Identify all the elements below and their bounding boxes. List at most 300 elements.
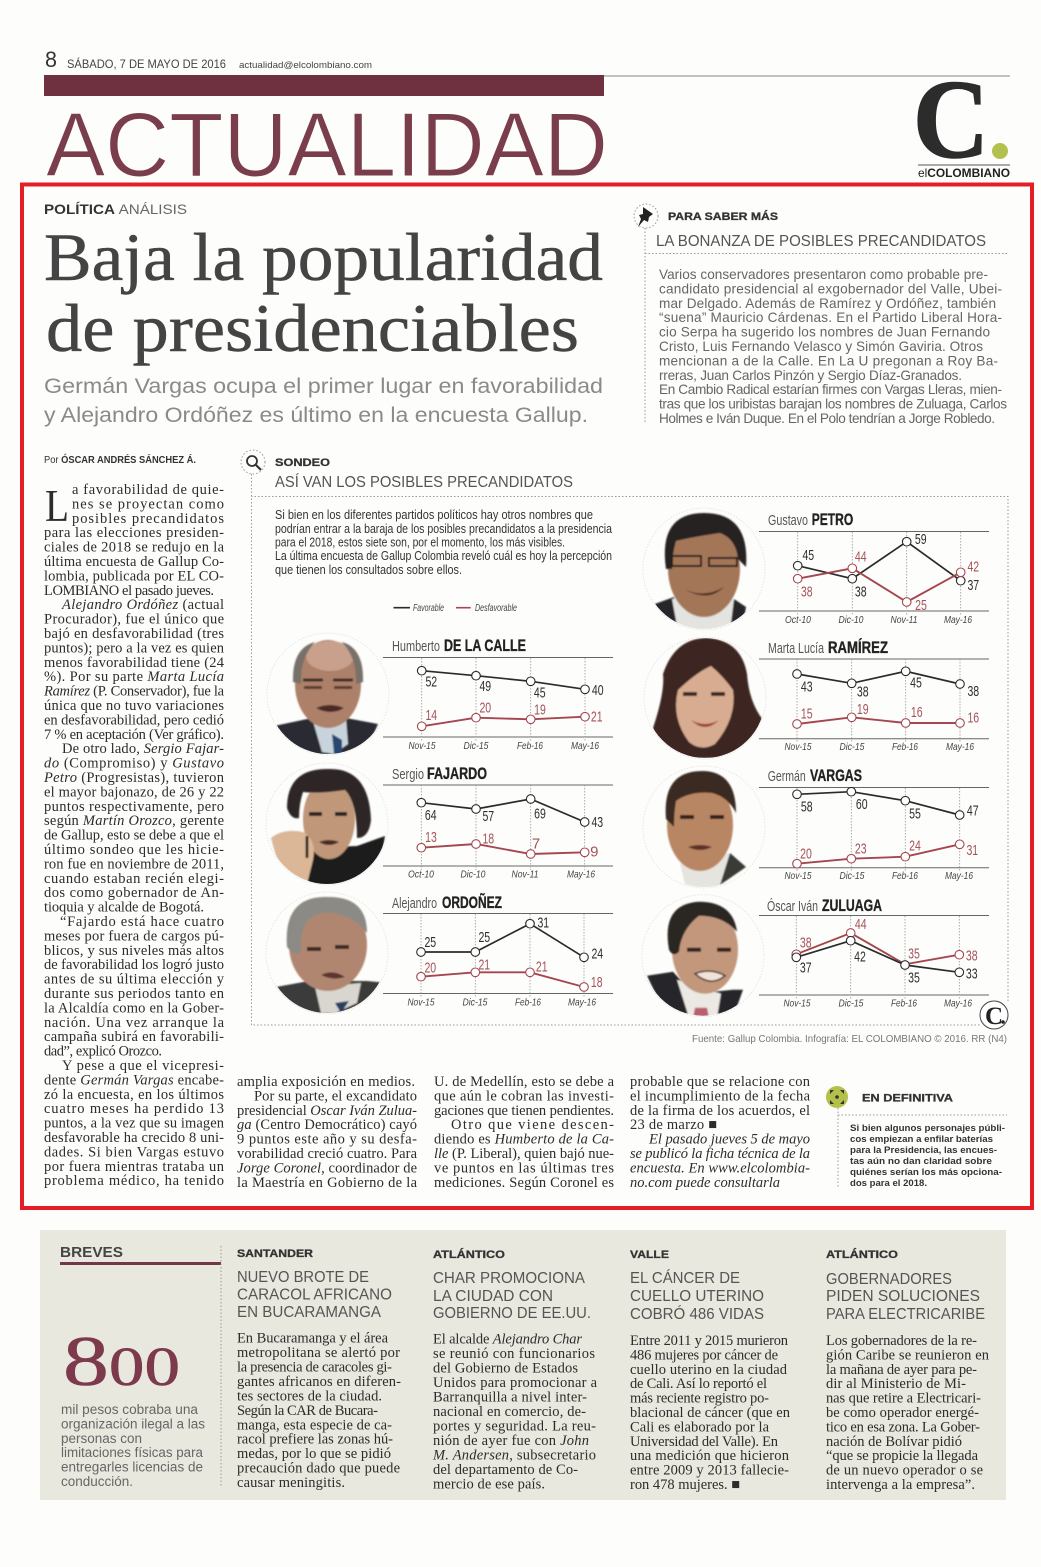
article column 3: diendo es Humberto de la Ca- xyxy=(434,1132,614,1148)
article column 1: problema médico, ha tenido xyxy=(44,1173,224,1189)
article column 4: de la firma de los acuerdos, el xyxy=(630,1103,810,1119)
red highlight frame xyxy=(22,184,1032,1208)
brief: Valle: 486 mujeres por cáncer de xyxy=(630,1347,778,1363)
brief: Atlantico, Char: nacional en comercio, de- xyxy=(433,1404,586,1420)
brief: Valle: EL CÁNCER DE xyxy=(630,1268,740,1287)
brief: Valle: una medición que hicieron xyxy=(630,1448,790,1464)
line chart: 13 xyxy=(425,829,437,846)
article column 1: menos favorabilidad tiene (24 xyxy=(44,655,225,671)
article column 1: antes de su última elección y xyxy=(44,972,225,988)
article column 1: De otro lado, Sergio Fajar- xyxy=(62,741,224,757)
line chart: May-16 xyxy=(945,870,973,882)
article column 1: Alejandro Ordóñez (actual xyxy=(61,597,224,613)
brief: Valle: Cali es elaborado por la xyxy=(630,1419,770,1435)
article column 1: tioquia y alcalde de Bogotá. xyxy=(44,900,204,916)
headline: Baja la popularidad xyxy=(44,219,603,295)
intro text xyxy=(275,508,612,577)
brief: Atlantico, gobernadores: “que se propicie la llegada xyxy=(826,1448,979,1464)
brief: Santander: tes sectores de la ciudad. xyxy=(237,1388,382,1404)
name: RAMÍREZ xyxy=(828,638,888,657)
article column 1: a favorabilidad de quie- xyxy=(72,482,224,498)
brief: Atlantico, gobernadores: nación de Bolívar pidió xyxy=(826,1434,962,1450)
text block: rreras, Juan Carlos Pinzón y Sergio Díaz-Granados. xyxy=(659,368,962,383)
line chart: 44 xyxy=(855,916,867,933)
brief: Valle: VALLE xyxy=(630,1249,669,1261)
brief: Valle: más reciente registro po- xyxy=(630,1391,769,1407)
article column 1: bajó en desfavorabilidad (tres xyxy=(44,626,224,642)
article column 2: presidencial Oscar Iván Zulua- xyxy=(237,1103,417,1119)
brief: Atlantico, gobernadores: gión Caribe se reunieron en xyxy=(826,1347,990,1363)
line chart: May-16 xyxy=(567,868,595,880)
name: DE LA CALLE xyxy=(444,636,526,655)
name: ZULUAGA xyxy=(822,896,882,915)
article column 3: lle (P. Liberal), quien bajó nue- xyxy=(434,1146,614,1162)
name: Humberto xyxy=(392,638,440,655)
text block: tas aún no dan claridad sobre xyxy=(850,1156,992,1167)
line chart: Dic-15 xyxy=(840,870,865,882)
article column 1: blicos, y sus niveles más altos xyxy=(44,943,224,959)
line chart: 45 xyxy=(802,547,814,564)
line chart: 37 xyxy=(800,960,812,977)
brief: Santander: Según la CAR de Bucara- xyxy=(237,1403,378,1419)
subheadline xyxy=(44,375,603,427)
brief: Atlantico, gobernadores: nas que retire a Electricari- xyxy=(826,1391,981,1407)
brief: Atlantico, gobernadores: PIDEN SOLUCIONES xyxy=(826,1288,980,1305)
article column 1: %). Por su parte Marta Lucía xyxy=(44,669,224,685)
logo: El Colombiano: C xyxy=(913,58,989,182)
line chart: Oct-10 xyxy=(785,614,811,626)
portrait: Vargas xyxy=(643,766,765,889)
article column 1: L xyxy=(45,481,69,531)
line chart: 52 xyxy=(425,674,437,691)
line chart: 19 xyxy=(534,701,546,718)
brief: Santander: CARACOL AFRICANO xyxy=(237,1286,392,1304)
line chart: 24 xyxy=(591,945,603,962)
article column 2: Jorge Coronel, coordinador de xyxy=(237,1160,417,1176)
line chart: Nov-15 xyxy=(784,998,811,1010)
article column 1: cuatro meses ha perdido 13 xyxy=(44,1101,224,1117)
line chart: May-16 xyxy=(944,614,972,626)
article column 3: mediciones. Según Coronel es xyxy=(434,1175,614,1191)
brief: Atlantico, gobernadores: PARA ELECTRICARIBE xyxy=(826,1306,985,1323)
headline xyxy=(44,219,603,366)
headline: de presidenciables xyxy=(46,290,579,366)
line chart: 23 xyxy=(855,841,867,858)
brief: Santander: gantes africanos en diferen- xyxy=(237,1374,401,1390)
brief: Santander: manga, esta especie de ca- xyxy=(237,1417,392,1433)
article column 1: campaña subirá en favorabili- xyxy=(44,1029,224,1045)
title: LA BONANZA DE POSIBLES PRECANDIDATOS xyxy=(656,233,986,250)
line chart: Nov-11 xyxy=(890,614,918,626)
article column 1: cuando estaban recién elegi- xyxy=(44,871,224,887)
text block xyxy=(659,267,1007,426)
article column 1: de favorabilidad los logró justo xyxy=(44,957,224,973)
brief: Santander: precaución dado que puede xyxy=(237,1461,400,1477)
subheadline: y Alejandro Ordóñez es último en la encuesta Gallup. xyxy=(44,404,588,427)
label: PARA SABER MÁS xyxy=(668,210,778,223)
line chart: 7 xyxy=(532,835,540,852)
line chart: Nov-15 xyxy=(408,996,435,1008)
brief: Atlantico, Char: M. Andersen, subsecretario xyxy=(432,1448,596,1464)
brief: Santander: metropolitana se alertó por xyxy=(237,1345,400,1361)
icon: arrows on green circle xyxy=(826,1086,848,1108)
name xyxy=(768,766,862,785)
brief: Valle: de Cali. Así lo reportó el xyxy=(630,1376,767,1392)
article column 1: nación. Una vez arranque la xyxy=(44,1015,225,1031)
line chart: Feb-16 xyxy=(517,740,543,752)
number caption: entregarles licencias de xyxy=(61,1460,203,1474)
kicker: POLÍTICA ANÁLISIS xyxy=(44,201,187,217)
brief: Valle: entre 2009 y 2013 fallecie- xyxy=(630,1463,789,1479)
line chart xyxy=(383,658,613,752)
brief: Valle: Universidad del Valle). En xyxy=(630,1434,779,1450)
article column 1: posibles precandidatos xyxy=(72,511,224,527)
brief: Atlantico, Char: nión de ayer fue con John xyxy=(433,1433,589,1449)
line chart: 25 xyxy=(478,929,490,946)
brief: Valle: cuello uterino en la ciudad xyxy=(630,1362,788,1378)
line chart: 60 xyxy=(856,796,868,813)
name xyxy=(767,896,882,915)
line chart: Nov-11 xyxy=(512,868,538,880)
brief: Atlantico, Char: GOBIERNO DE EE.UU. xyxy=(433,1305,591,1322)
line chart: Dic-15 xyxy=(840,741,865,753)
article column 4: no.com puede consultarla xyxy=(630,1175,780,1191)
line chart: 58 xyxy=(801,799,813,816)
line chart: 18 xyxy=(591,974,603,991)
name xyxy=(768,638,888,657)
line chart xyxy=(759,787,989,882)
line chart: 21 xyxy=(591,709,603,726)
line chart: 19 xyxy=(857,701,869,718)
text block: Cristo, Luis Fernando Velasco y Simón Gaviria. Otros xyxy=(659,339,983,354)
brief: Santander: medas, por lo que se pidió xyxy=(237,1446,391,1462)
text block: Varios conservadores presentaron como probable pre- xyxy=(659,267,988,282)
line chart: 33 xyxy=(966,965,978,982)
line chart: 38 xyxy=(801,584,813,601)
article column 3: que aún le cobran las investi- xyxy=(434,1088,614,1104)
article column 2: amplia exposición en medios. xyxy=(237,1074,415,1090)
label: SONDEO xyxy=(275,457,330,469)
line chart: 43 xyxy=(801,679,813,696)
brief: Atlantico, Char: del departamento de Co- xyxy=(433,1462,578,1478)
name xyxy=(392,764,487,783)
article column 1: por fuera mientras trataba un xyxy=(44,1159,225,1175)
name: Alejandro xyxy=(392,895,437,912)
article column 1: zó la encuesta, en los últimos xyxy=(44,1087,224,1103)
text block: quiénes serían los más opciona- xyxy=(850,1167,1002,1178)
icon: magnifier xyxy=(241,450,265,474)
article column 2: vorabilidad creció cuatro. Para xyxy=(237,1146,418,1162)
brief: Atlantico, Char: El alcalde Alejandro Char xyxy=(433,1332,582,1348)
article column 2 xyxy=(237,1074,418,1191)
number caption xyxy=(61,1402,205,1489)
article column 4: encuesta. En www.elcolombia- xyxy=(630,1160,810,1176)
line chart: Nov-15 xyxy=(784,870,812,882)
article column 1: la Alcaldía como en la Gober- xyxy=(44,1000,224,1016)
line chart: 20 xyxy=(424,959,436,976)
line chart: 42 xyxy=(854,949,866,966)
article column 3: Otro que viene descen- xyxy=(451,1117,614,1133)
article column 3: ve puntos en las últimas tres xyxy=(434,1160,614,1176)
line chart: 55 xyxy=(909,805,921,822)
line chart: 37 xyxy=(967,577,979,594)
number caption: limitaciones físicas para xyxy=(61,1445,203,1460)
brief: Atlantico, Char xyxy=(432,1248,598,1492)
brief: Atlantico, Char: del Gobierno de Estados xyxy=(433,1360,578,1376)
name xyxy=(392,636,526,655)
brief: Atlantico, gobernadores: ATLÁNTICO xyxy=(826,1248,899,1261)
brief: Atlantico, gobernadores: GOBERNADORES xyxy=(826,1271,952,1288)
portrait: Fajardo xyxy=(266,763,388,886)
intro text: podrían entrar a la baraja de los posibles precandidatos a la presidencia xyxy=(275,522,612,536)
source credit: Fuente: Gallup Colombia. Infografía: EL COLOMBIANO © 2016. RR (N4) xyxy=(692,1033,1007,1045)
article column 1: dades. Si bien Vargas estuvo xyxy=(44,1144,224,1160)
name: FAJARDO xyxy=(427,764,487,783)
line chart: 24 xyxy=(909,838,921,855)
line chart: Dic-15 xyxy=(838,998,864,1010)
brief: Santander: racol prefiere las zonas hú- xyxy=(237,1432,393,1448)
line chart: 40 xyxy=(592,682,604,699)
article column 1: puntos); pero a la vez es quien xyxy=(44,640,225,656)
brief: Santander: EN BUCARAMANGA xyxy=(237,1304,381,1321)
panel: sondeo infographic xyxy=(241,450,1008,1030)
line chart: 18 xyxy=(482,830,494,847)
article column 1: meses por fuera de cargos pú- xyxy=(44,928,224,944)
panel: chart De la Calle xyxy=(267,633,613,756)
line chart: Feb-16 xyxy=(891,998,917,1010)
article column 3 xyxy=(434,1074,615,1191)
text block: tras que los uribistas barajan los nombres de Zuluaga, Carlos xyxy=(659,397,1007,412)
brief: Atlantico, gobernadores: la mañana de ayer para pe- xyxy=(826,1362,977,1378)
brief: Atlantico, Char: portes y seguridad. La reu- xyxy=(433,1418,596,1434)
line chart: Nov-15 xyxy=(784,741,812,753)
line chart: 14 xyxy=(425,707,437,724)
brief: Atlantico, Char: LA CIUDAD CON xyxy=(433,1288,553,1305)
panel: chart Petro xyxy=(643,508,989,631)
brief: Atlantico, gobernadores: intervenga a la empresa”. xyxy=(826,1477,975,1493)
byline: Por ÓSCAR ANDRÉS SÁNCHEZ Á. xyxy=(44,453,196,466)
article column 4 xyxy=(630,1074,811,1191)
text block: cos empiezan a enfilar baterías xyxy=(850,1134,993,1145)
text block: cio Serpa ha sugerido los nombres de Juan Fernando xyxy=(659,325,990,340)
line chart: 21 xyxy=(536,959,548,976)
line chart: 64 xyxy=(425,807,437,824)
portrait: Ramirez xyxy=(644,637,766,759)
article column 1: durante sus periodos tanto en xyxy=(44,986,225,1002)
line chart: 31 xyxy=(537,914,549,931)
text block: para la Presidencia, las encues- xyxy=(850,1145,997,1156)
line chart: 45 xyxy=(910,675,922,692)
line chart: Nov-15 xyxy=(408,740,436,752)
big number: 800 xyxy=(63,1323,180,1401)
number caption: conducción. xyxy=(61,1474,133,1489)
line chart: May-16 xyxy=(946,741,974,753)
legend xyxy=(394,602,517,614)
line chart: 49 xyxy=(479,678,491,695)
line chart: 25 xyxy=(915,597,927,614)
name: Sergio xyxy=(392,766,424,783)
brief: Atlantico, gobernadores: dir al Ministerio de Mi- xyxy=(826,1376,966,1392)
brief: Atlantico, gobernadores: Los gobernadores de la re- xyxy=(826,1333,977,1349)
article column 4: el incumplimiento de la fecha xyxy=(630,1088,811,1104)
line chart xyxy=(383,914,613,1008)
label: EN DEFINITIVA xyxy=(862,1092,953,1104)
page header line: 8 xyxy=(45,47,57,72)
name: Marta Lucía xyxy=(768,640,824,657)
brief: Atlantico, Char: ATLÁNTICO xyxy=(433,1248,506,1261)
legend: Favorable xyxy=(413,602,444,614)
line chart xyxy=(383,785,613,880)
brief: Santander: En Bucaramanga y el área xyxy=(237,1331,389,1347)
brief: Santander: SANTANDER xyxy=(237,1248,313,1260)
line chart: Dic-15 xyxy=(462,996,488,1008)
name: Gustavo xyxy=(768,512,808,529)
brief: Valle: Entre 2011 y 2015 murieron xyxy=(630,1333,789,1349)
text block: Holmes e Iván Duque. En el Polo tendrían a Jorge Robledo. xyxy=(659,411,995,426)
line chart: 38 xyxy=(967,683,979,700)
article column 1: ciales de 2018 se redujo en la xyxy=(44,540,225,556)
name: PETRO xyxy=(812,510,853,529)
intro text: Si bien en los diferentes partidos políticos hay otros nombres que xyxy=(275,508,593,522)
line chart: 38 xyxy=(800,935,812,952)
line chart xyxy=(759,531,989,626)
article column 1: 7 % en aceptación (Ver gráfico). xyxy=(44,727,224,743)
line chart: 38 xyxy=(855,584,867,601)
article column 1: puntos, a la vez que su imagen xyxy=(44,1116,225,1132)
intro text: que tienen los consultados sobre ellos. xyxy=(275,563,462,577)
brief: Valle xyxy=(630,1249,791,1493)
portrait: Ordonez xyxy=(265,892,389,1015)
panel: en definitiva xyxy=(826,1086,1007,1189)
article column 2: 9 puntos este año y su desfa- xyxy=(237,1132,417,1148)
line chart: Dic-10 xyxy=(460,868,486,880)
article column 1: desfavorable ha crecido 8 uni- xyxy=(44,1130,224,1146)
brief: Valle: ron 478 mujeres. ■ xyxy=(630,1477,740,1493)
line chart: 9 xyxy=(590,844,598,861)
panel: chart Zuluaga xyxy=(642,895,989,1018)
article column 1: último sondeo que les hicie- xyxy=(44,842,224,858)
page header line xyxy=(45,47,372,72)
line chart: 42 xyxy=(967,559,979,576)
name: Óscar Iván xyxy=(767,898,818,915)
name xyxy=(768,510,853,529)
line chart: 16 xyxy=(967,710,979,727)
article column 2: Por su parte, el excandidato xyxy=(254,1088,417,1104)
line chart: 38 xyxy=(966,947,978,964)
subheadline: Germán Vargas ocupa el primer lugar en favorabilidad xyxy=(44,375,603,398)
brief: Valle: blacional de cáncer (que en xyxy=(630,1405,791,1421)
text block: En Cambio Radical estarían firmes con Vargas Lleras, mien- xyxy=(659,382,1002,397)
text block: mencionan a de la Calle. En La U pregonan a Roy Ba- xyxy=(659,353,998,368)
line chart: Feb-16 xyxy=(892,741,918,753)
title: ASÍ VAN LOS POSIBLES PRECANDIDATOS xyxy=(275,472,573,491)
portrait: Zuluaga xyxy=(642,895,764,1018)
article column 1: Petro (Progresistas), tuvieron xyxy=(43,770,225,786)
page header line: SÁBADO, 7 DE MAYO DE 2016 xyxy=(67,58,226,71)
article column 4: probable que se relacione con xyxy=(630,1074,811,1090)
article column 1: LOMBIANO el pasado jueves. xyxy=(44,583,214,599)
line chart: 59 xyxy=(915,531,927,548)
article column 1: única que no tuvo variaciones xyxy=(44,698,224,714)
brief: Valle: COBRÓ 486 VIDAS xyxy=(630,1304,764,1323)
panel: chart Fajardo xyxy=(266,763,613,886)
article column 4: El pasado jueves 5 de mayo xyxy=(648,1132,810,1148)
line chart: 47 xyxy=(967,803,979,820)
panel: chart Vargas xyxy=(643,766,989,889)
number caption: mil pesos cobraba una xyxy=(61,1402,198,1417)
line chart: Oct-10 xyxy=(408,868,434,880)
legend: Desfavorable xyxy=(475,602,517,614)
panel: para saber mas xyxy=(634,204,1008,426)
brief: Santander: causar meningitis. xyxy=(237,1475,345,1491)
brief: Santander: la presencia de caracoles gi- xyxy=(237,1360,392,1376)
article column 1: Ramírez (P. Conservador), fue la xyxy=(43,684,225,700)
line chart: May-16 xyxy=(568,996,596,1008)
name: ORDOÑEZ xyxy=(442,892,502,912)
portrait: De la Calle xyxy=(267,633,389,756)
article column 1: dad”, explicó Orozco. xyxy=(44,1044,162,1060)
article column 1: lombia, publicada por EL CO- xyxy=(44,568,224,584)
article column 1 xyxy=(43,481,225,1189)
logo: El Colombiano: elCOLOMBIANO xyxy=(918,166,1010,180)
logo badge xyxy=(980,1001,1008,1030)
article column 1: de Gallup, esto se debe a que el xyxy=(44,828,224,844)
number caption: personas con xyxy=(61,1431,142,1446)
brief: Atlantico, gobernadores: de un nuevo operador o se xyxy=(826,1463,983,1479)
brief: Santander: NUEVO BROTE DE xyxy=(237,1269,369,1286)
line chart: 16 xyxy=(911,704,923,721)
line chart xyxy=(759,916,989,1010)
line chart: 25 xyxy=(424,934,436,951)
line chart: Dic-15 xyxy=(464,740,489,752)
line chart: 20 xyxy=(800,845,812,862)
line chart: 35 xyxy=(908,970,920,987)
article column 1: en desfavorabilidad, pero cedió xyxy=(44,712,224,728)
line chart: 21 xyxy=(478,956,490,973)
article column 1: ron fue en noviembre de 2011, xyxy=(44,856,224,872)
line chart: 45 xyxy=(534,684,546,701)
maroon section bar xyxy=(44,75,604,96)
line chart xyxy=(759,659,989,753)
text block: candidato presidencial al exgobernador del Valle, Ubei- xyxy=(659,281,1002,296)
article column 1: según Martín Orozco, gerente xyxy=(44,813,224,829)
line chart: 44 xyxy=(855,549,867,566)
article column 1: para las elecciones presiden- xyxy=(44,525,224,541)
text block: “suena” Mauricio Cárdenas. En el Partido Liberal Hora- xyxy=(659,310,1002,325)
line chart: 38 xyxy=(857,684,869,701)
article column 3: gaciones que tienen pendientes. xyxy=(434,1103,614,1119)
portrait: Petro xyxy=(643,508,765,631)
line chart: Feb-16 xyxy=(892,870,918,882)
heading: BREVES xyxy=(60,1244,123,1261)
article column 4: se publicó la ficha técnica de la xyxy=(630,1146,810,1162)
article column 1: “Fajardo está hace cuatro xyxy=(60,914,224,930)
intro text: La última encuesta de Gallup Colombia reveló cuál es hoy la percepción xyxy=(275,549,612,563)
text block xyxy=(850,1123,1005,1189)
brief: Atlantico, Char: CHAR PROMOCIONA xyxy=(433,1270,585,1287)
article column 1: do (Compromiso) y Gustavo xyxy=(44,756,224,772)
line chart: 15 xyxy=(801,705,813,722)
text block: dos para el 2018. xyxy=(850,1178,927,1189)
line chart: 35 xyxy=(908,945,920,962)
name: Germán xyxy=(768,768,806,785)
brief: Atlantico, Char: Unidos para promocionar a xyxy=(433,1375,598,1391)
brief: Atlantico, gobernadores: be como operador energé- xyxy=(826,1405,979,1421)
logo badge: C xyxy=(985,1003,1003,1030)
page header line: actualidad@elcolombiano.com xyxy=(239,60,372,71)
brief: Atlantico, gobernadores xyxy=(826,1248,990,1493)
line chart: Dic-10 xyxy=(838,614,864,626)
